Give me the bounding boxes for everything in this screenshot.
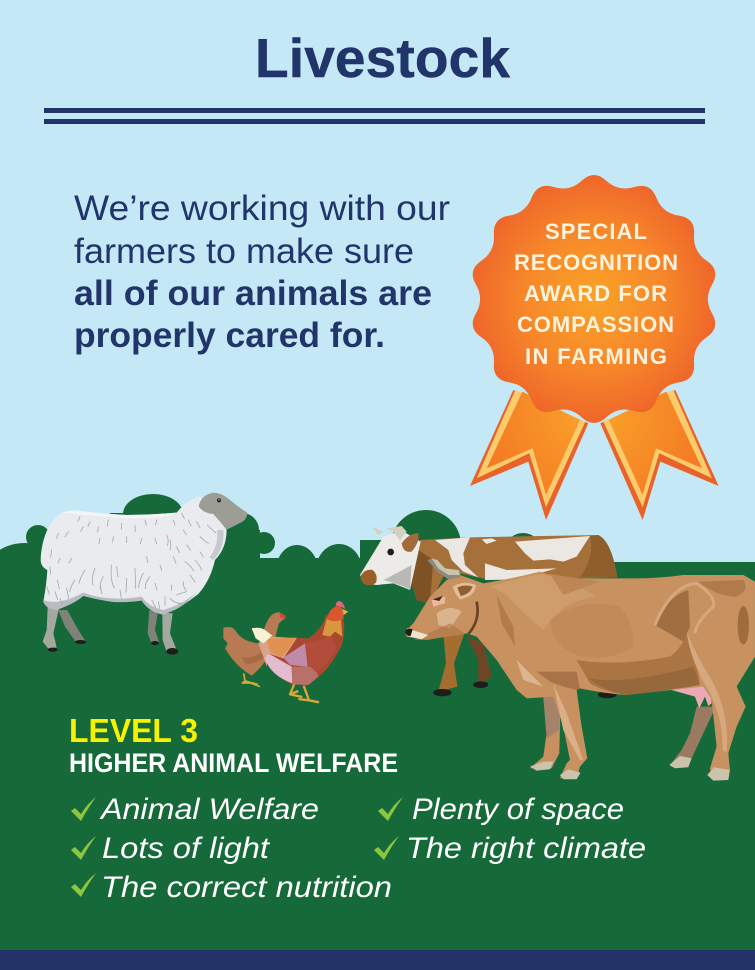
sheep fleece [41,497,227,615]
back cow body [410,535,617,603]
intro text [74,189,450,355]
footer bar [0,950,755,970]
fleece wool marks [47,513,216,608]
front cow head details [405,558,476,640]
level heading: LEVEL 3 [69,712,198,749]
front cow udder [672,677,712,708]
large hen [252,601,348,702]
back cow head [360,526,421,590]
badge text: RECOGNITION [514,250,678,275]
check list [71,793,646,904]
badge text [514,219,678,369]
hedge and field [0,494,755,952]
badge text: SPECIAL [545,219,647,244]
front cow shading [468,574,749,760]
sheep head [199,493,247,529]
title: Livestock [255,27,510,89]
sheep legs [43,607,178,655]
check: animal welfare: Animal Welfare [99,793,319,826]
check: lots of light: Lots of light [102,832,271,865]
scalloped badge [473,175,715,423]
level subheading: HIGHER ANIMAL WELFARE [69,748,398,778]
intro text: properly cared for. [74,316,385,355]
sheep [41,493,247,655]
back cow [360,526,617,698]
ribbon tails [470,390,719,520]
intro text: farmers to make sure [74,232,414,271]
small hen [223,612,286,687]
badge text: COMPASSION [517,312,674,337]
front cow [405,558,755,781]
back cow white patches [435,536,590,580]
intro text: all of our animals are [74,274,432,313]
double rule under title [44,108,705,124]
award rosette [470,175,719,520]
badge text: AWARD FOR [524,281,667,306]
check: the right climate: The right climate [406,832,646,865]
check: plenty of space: Plenty of space [412,793,624,826]
back cow legs [433,632,617,698]
front cow far legs [530,697,716,771]
front cow hooves [560,767,730,781]
chickens [223,601,348,702]
badge text: IN FARMING [525,344,667,369]
check: the correct nutrition: The correct nutrition [101,871,392,904]
front cow body [405,572,755,778]
intro text: We’re working with our [74,189,450,228]
